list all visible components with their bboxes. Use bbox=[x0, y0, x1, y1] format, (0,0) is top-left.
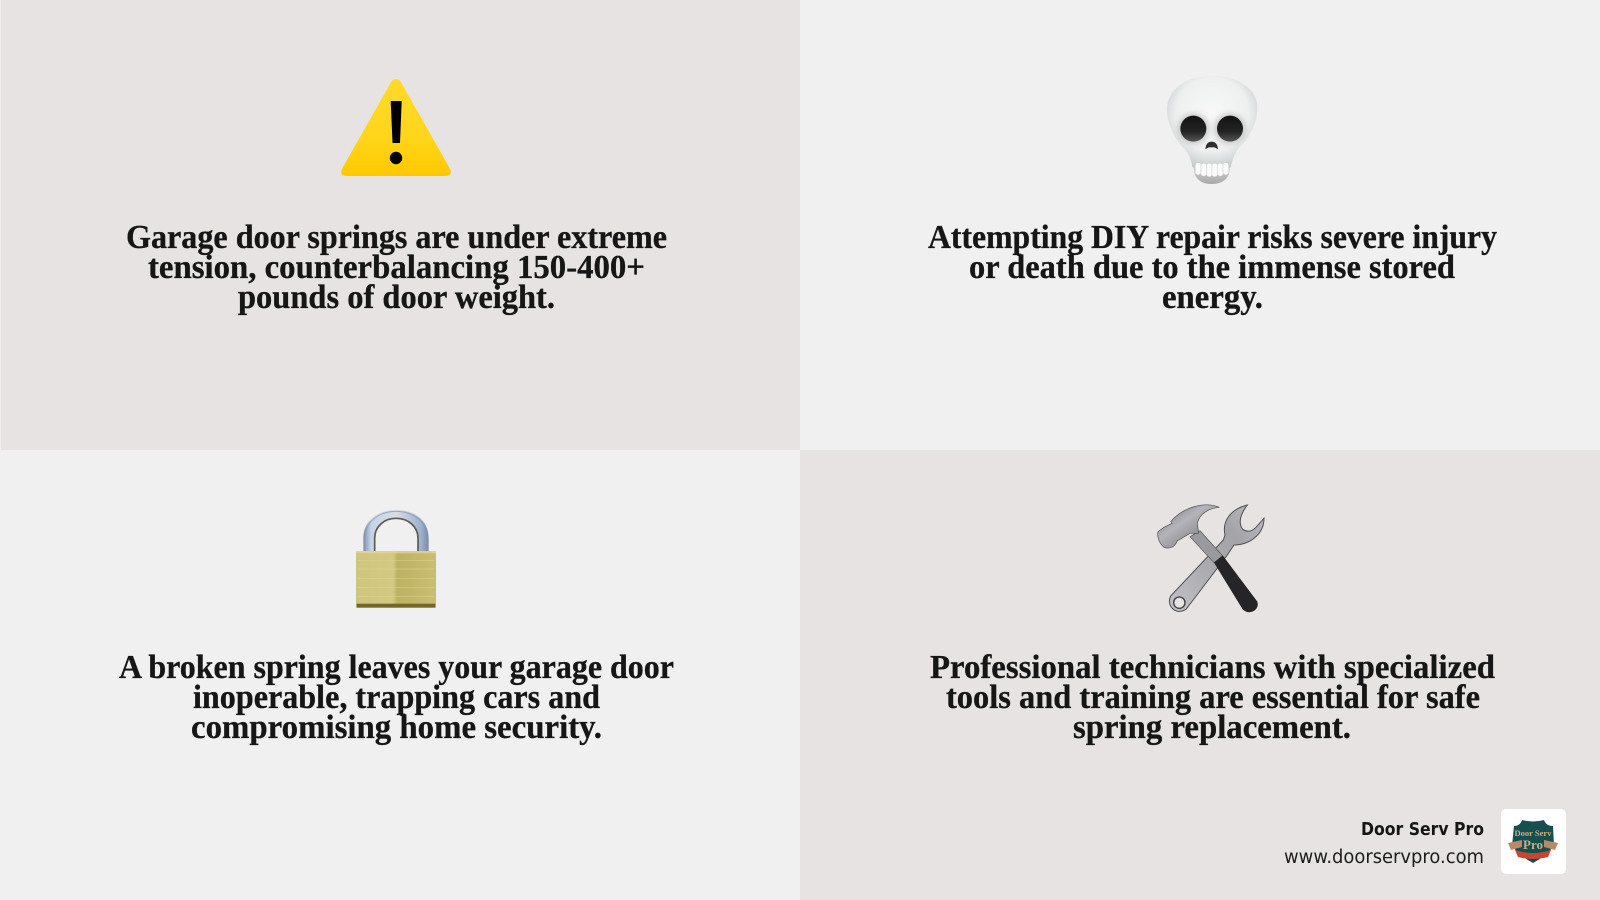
panel: broken spring consequences bbox=[0, 450, 800, 900]
panel: injury risk bbox=[800, 0, 1600, 450]
text: DIY risk statement: or death due to the immense stored bbox=[969, 249, 1455, 286]
text: spring tension statement: tension, counterbalancing 150-400+ bbox=[148, 249, 645, 286]
logo card bbox=[1501, 809, 1566, 874]
text: technicians statement: Professional technicians with specialized bbox=[930, 649, 1495, 686]
text: DIY risk statement bbox=[928, 219, 1497, 316]
brand footer bbox=[1284, 809, 1566, 874]
logo card: Door Serv bbox=[1515, 828, 1552, 838]
text: spring tension statement bbox=[126, 219, 667, 316]
text: DIY risk statement: Attempting DIY repair risks severe injury bbox=[928, 219, 1497, 256]
text: spring tension statement: pounds of door weight. bbox=[238, 279, 555, 316]
text: technicians statement: spring replacement. bbox=[1073, 709, 1351, 746]
text: broken spring statement: compromising home security. bbox=[191, 709, 602, 746]
icon: warning triangle bbox=[341, 79, 451, 176]
website: www.doorservpro.com bbox=[1284, 847, 1484, 868]
text: broken spring statement bbox=[119, 649, 674, 746]
text: spring tension statement: Garage door springs are under extreme bbox=[126, 219, 667, 256]
text: broken spring statement: A broken spring leaves your garage door bbox=[119, 649, 674, 686]
text: technicians statement bbox=[930, 649, 1495, 746]
text: broken spring statement: inoperable, trapping cars and bbox=[193, 679, 600, 716]
panel: spring tension bbox=[0, 0, 800, 450]
logo card: Pro bbox=[1523, 837, 1543, 852]
panel: professional technicians bbox=[800, 450, 1600, 900]
text: technicians statement: tools and training are essential for safe bbox=[946, 679, 1480, 716]
brand name: Door Serv Pro bbox=[1361, 819, 1484, 840]
text: DIY risk statement: energy. bbox=[1162, 279, 1263, 316]
icon: padlock bbox=[356, 510, 436, 608]
icon: hammer and wrench bbox=[1158, 505, 1264, 612]
icon: skull bbox=[1167, 76, 1257, 184]
